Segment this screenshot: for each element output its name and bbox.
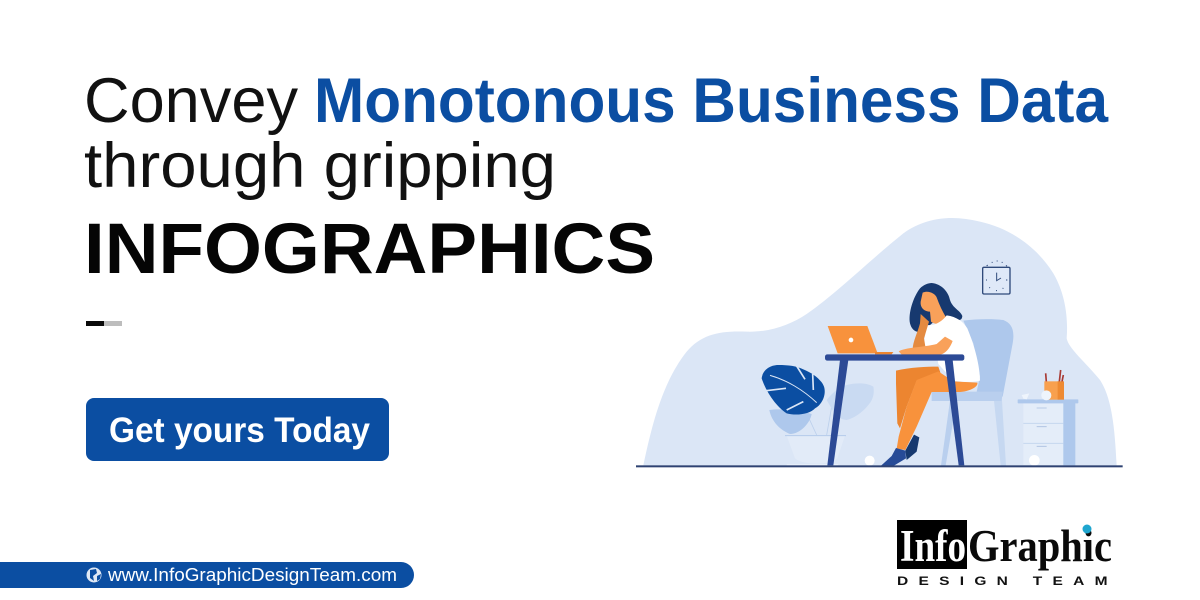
forearm: [899, 337, 953, 355]
logo: Graphic: [968, 521, 1112, 571]
footer url bar: [0, 562, 414, 588]
laptop: [828, 326, 893, 354]
background blob: [643, 218, 1117, 465]
logo: DESIGN TEAM: [897, 575, 1108, 588]
near shoe: [881, 448, 906, 466]
hair back: [910, 283, 962, 332]
illustration: woman at desk: [636, 218, 1123, 467]
clock: [983, 261, 1010, 294]
crumpled paper: [865, 455, 1040, 466]
woman: [881, 283, 980, 466]
propping arm: [913, 314, 929, 350]
desk: [825, 354, 964, 465]
far leg: [896, 367, 941, 428]
near leg: [897, 371, 977, 450]
filing cabinet: [1018, 399, 1078, 465]
far shoe: [905, 435, 919, 460]
headline: [84, 66, 1109, 289]
neck and face: [921, 292, 946, 324]
chair: [932, 319, 1013, 465]
button: Get yours Today: [109, 411, 371, 450]
accent dash: [86, 321, 122, 326]
headline: Convey: [84, 66, 299, 136]
plant: [762, 365, 874, 465]
button: [86, 398, 389, 461]
logo: [897, 520, 1112, 588]
headline: INFOGRAPHICS: [84, 210, 655, 289]
ground line: [636, 465, 1123, 467]
shirt: [923, 315, 980, 382]
headline: through gripping: [84, 131, 556, 201]
headline: Monotonous Business Data: [314, 66, 1109, 136]
footer url bar: www.InfoGraphicDesignTeam.com: [107, 565, 397, 585]
pencil holder: [1022, 370, 1064, 400]
logo: Info: [900, 521, 966, 571]
icon: globe: [86, 568, 102, 582]
